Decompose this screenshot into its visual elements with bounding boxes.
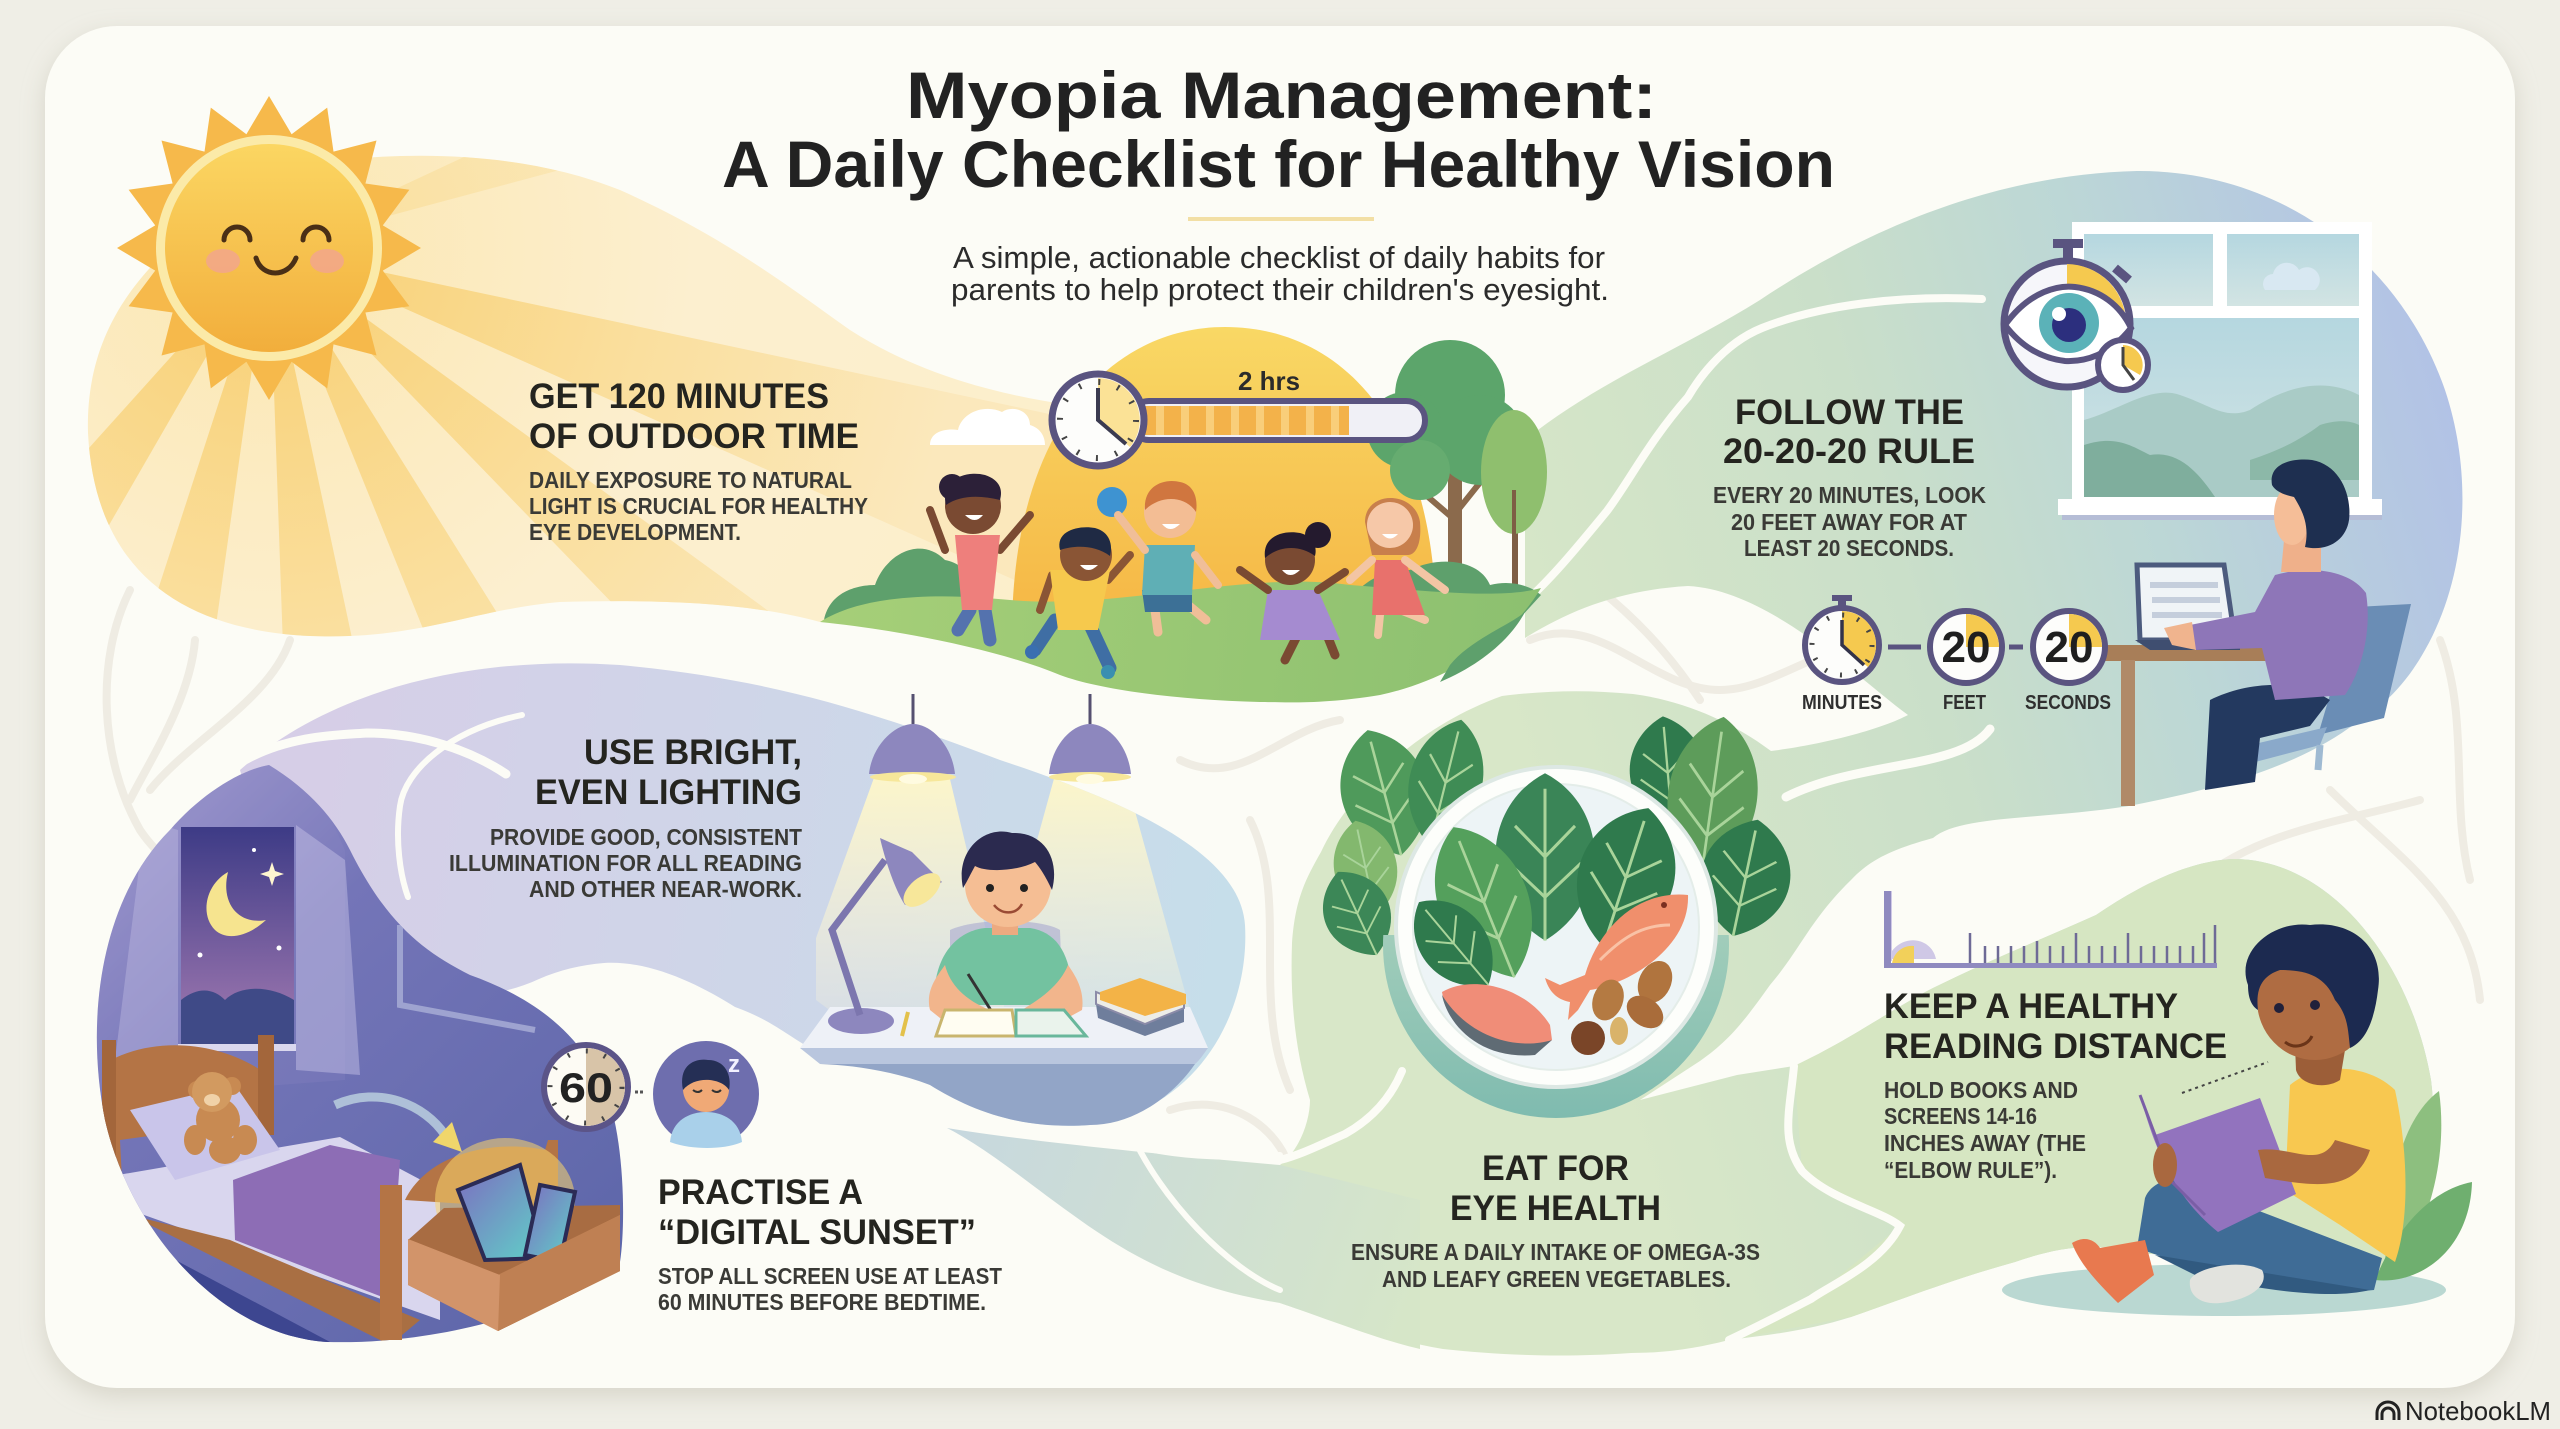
icon: sleeping child: [635, 1041, 759, 1148]
text block: outdoor time: LIGHT IS CRUCIAL FOR HEALTHY: [529, 493, 868, 519]
dotted distance line: [2182, 1062, 2268, 1093]
text block: lighting: EVEN LIGHTING: [535, 773, 802, 812]
text block: outdoor time: OF OUTDOOR TIME: [529, 417, 859, 456]
text block: digital sunset: PRACTISE A: [658, 1173, 863, 1212]
text block: digital sunset: STOP ALL SCREEN USE AT LEAST: [658, 1263, 1002, 1289]
subtitle: [951, 240, 1609, 307]
text block: eye health: ENSURE A DAILY INTAKE OF OMEGA-3S: [1351, 1239, 1760, 1265]
panel: blue-green band at bottom centre: [947, 1128, 1420, 1349]
icon: stopwatch minutes: [1805, 595, 2023, 682]
curtains: [115, 820, 178, 1060]
text block: 20-20-20 rule: 20-20-20 RULE: [1723, 432, 1975, 471]
text block: eye health: EYE HEALTH: [1450, 1189, 1661, 1228]
text block: outdoor time: EYE DEVELOPMENT.: [529, 519, 741, 545]
light cones from pendant lamps: [790, 775, 1190, 1010]
illustration: bedroom at night: [80, 750, 640, 1350]
illustration: smiling sun: [117, 96, 421, 400]
cloud: [930, 409, 1045, 445]
child in purple dress: [1240, 522, 1345, 660]
desk: [2104, 645, 2276, 661]
text block: lighting: AND OTHER NEAR-WORK.: [529, 876, 802, 902]
floor: [177, 1261, 330, 1342]
text block: reading distance: READING DISTANCE: [1884, 1027, 2227, 1066]
labels: minutes feet seconds: MINUTES: [1802, 692, 1882, 714]
book and hands: [2140, 1095, 2296, 1232]
desk lamp: [828, 1008, 894, 1034]
subtitle: A simple, actionable checklist of daily habits for: [953, 240, 1605, 275]
torso: [2285, 1069, 2406, 1262]
stack of books: [1096, 1004, 1184, 1036]
fish: [1545, 895, 1688, 1020]
child: [950, 921, 1062, 985]
panel: green and blue flowing shape: [1280, 171, 2462, 1356]
icon: eye stopwatch: [2004, 239, 2148, 390]
pillow: [130, 1085, 280, 1180]
icon: sleeping child: z: [728, 1051, 740, 1078]
wall frame: [400, 925, 535, 1030]
text block: eye health: AND LEAFY GREEN VEGETABLES.: [1382, 1266, 1731, 1292]
text block: reading distance: [1884, 987, 2227, 1183]
icon: 60 minute timer: 60: [559, 1064, 613, 1111]
child in red dress: [1350, 498, 1445, 635]
head: [2281, 530, 2321, 572]
text block: eye health: [1351, 1149, 1760, 1292]
text block: digital sunset: “DIGITAL SUNSET”: [658, 1213, 976, 1252]
curved arrow: [335, 1097, 445, 1135]
labels: minutes feet seconds: [1802, 692, 2111, 714]
text block: eye health: EAT FOR: [1482, 1149, 1629, 1188]
title: A Daily Checklist for Healthy Vision: [722, 127, 1835, 201]
panel: reading distance green area: [1729, 859, 2433, 1340]
panel: outdoor scene with hill and children: [820, 327, 1547, 702]
bed headboard: [102, 1045, 258, 1172]
illustration: window with mountain view: [2058, 222, 2382, 520]
text block: reading distance: HOLD BOOKS AND: [1884, 1077, 2078, 1103]
clock with 2 hour progress bar: [1052, 374, 1425, 466]
laptop: [2137, 565, 2235, 640]
illustration: child reading a book: [2002, 924, 2472, 1316]
child in teal: [1118, 481, 1218, 632]
text block: outdoor time: GET 120 MINUTES: [529, 377, 829, 416]
panel: bright lighting background: [240, 663, 1245, 1126]
text block: 20-20-20 rule: EVERY 20 MINUTES, LOOK: [1713, 482, 1986, 508]
trees: [1367, 340, 1547, 590]
labels: minutes feet seconds: SECONDS: [2025, 692, 2111, 714]
icon: 20 feet: 20: [1942, 623, 1990, 672]
title: Myopia Management:: [906, 58, 1657, 132]
child in pink: [930, 474, 1030, 640]
glowing devices in drawer: [408, 1138, 620, 1331]
torso and arm: [2190, 570, 2368, 700]
mattress and sheet: [118, 1137, 440, 1320]
text block: lighting: USE BRIGHT,: [584, 733, 802, 772]
icon: 20 seconds: 20: [2044, 623, 2094, 672]
text block: 20-20-20 rule: 20 FEET AWAY FOR AT: [1731, 509, 1967, 535]
text block: lighting: [449, 733, 802, 902]
head: [2295, 1045, 2345, 1085]
text block: outdoor time: [529, 377, 868, 545]
panel: outdoor time sunburst background: [88, 156, 1052, 636]
illustration: child at desk under lamps: [790, 694, 1208, 1126]
text block: 20-20-20 rule: [1713, 393, 1986, 561]
salmon fillet: [1442, 984, 1552, 1052]
text block: outdoor time: DAILY EXPOSURE TO NATURAL: [529, 467, 852, 493]
bushes: [824, 549, 985, 625]
legs: [2205, 685, 2330, 790]
text block: 20-20-20 rule: LEAST 20 SECONDS.: [1744, 535, 1954, 561]
icon: 20 seconds: [2033, 611, 2105, 683]
text block: lighting: PROVIDE GOOD, CONSISTENT: [490, 824, 802, 850]
illustration: plate of healthy food: [1308, 711, 1801, 1118]
desk: [800, 1007, 1208, 1048]
text block: reading distance: “ELBOW RULE”).: [1884, 1157, 2057, 1183]
open book on desk: [936, 1010, 1016, 1036]
teddy bear: [196, 1098, 240, 1142]
icon: 60 minute timer: [544, 1045, 628, 1129]
text block: reading distance: SCREENS 14-16: [1884, 1103, 2037, 1129]
legs: [2137, 1180, 2382, 1291]
title: [722, 58, 1835, 201]
text block: reading distance: KEEP A HEALTHY: [1884, 987, 2178, 1026]
illustration: ruler for reading distance: [1884, 891, 2217, 968]
subtitle: parents to help protect their children's eyesight.: [951, 272, 1609, 307]
labels: minutes feet seconds: FEET: [1943, 692, 1986, 714]
icon: 20 feet: [1930, 611, 2002, 683]
text block: digital sunset: 60 MINUTES BEFORE BEDTIME.: [658, 1289, 986, 1315]
nuts: [1631, 955, 1679, 1009]
text block: digital sunset: [658, 1173, 1002, 1315]
footboard: [380, 1185, 402, 1340]
night window: [181, 827, 294, 1000]
label: 2 hrs: 2 hrs: [1238, 366, 1300, 396]
logo: NotebookLM: NotebookLM: [2405, 1396, 2551, 1426]
text block: reading distance: INCHES AWAY (THE: [1884, 1130, 2086, 1156]
shoes: [2072, 1239, 2154, 1303]
illustration: person at laptop: [2104, 460, 2411, 806]
text block: lighting: ILLUMINATION FOR ALL READING: [449, 850, 802, 876]
blue ball: [1097, 487, 1127, 517]
text block: 20-20-20 rule: FOLLOW THE: [1735, 393, 1964, 432]
chair: [2318, 604, 2411, 735]
child in yellow: [1025, 527, 1130, 679]
